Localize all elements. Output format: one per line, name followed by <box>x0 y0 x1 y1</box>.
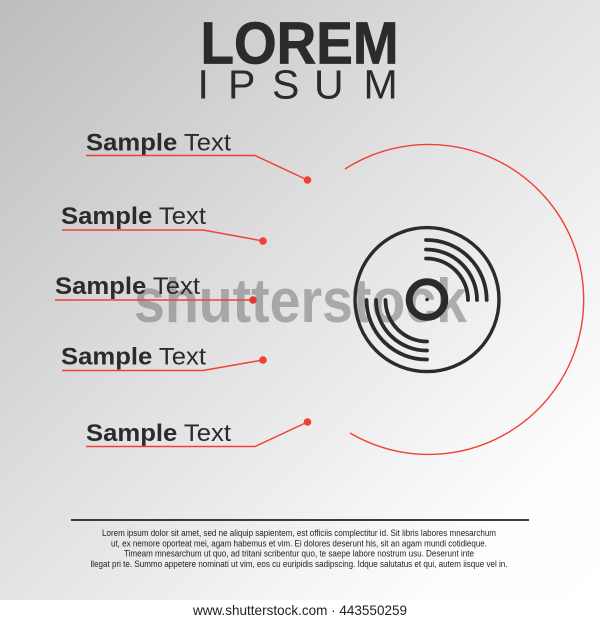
callout 5: Sample Text <box>86 420 231 447</box>
body text <box>90 528 508 569</box>
watermark: shutterstock <box>134 267 467 336</box>
title: LOREM <box>200 10 398 76</box>
callout 2 <box>61 203 267 245</box>
callout 1 <box>86 130 311 184</box>
large red arc <box>345 144 584 454</box>
title: IPSUM <box>198 62 398 108</box>
body text: Lorem ipsum dolor sit amet, sed ne aliquip sapientem, est officiis complectitur id. Sit libris labores mnesarchum <box>102 528 496 538</box>
footer url: www.shutterstock.com · 443550259 <box>192 602 407 618</box>
icon: vinyl record <box>355 228 499 372</box>
callout 3: Sample Text <box>55 273 200 300</box>
callout 4: Sample Text <box>61 344 206 370</box>
title <box>198 10 398 108</box>
callout 5 <box>86 418 311 447</box>
callout 2: Sample Text <box>61 203 206 230</box>
callout 4 <box>61 344 267 370</box>
divider <box>71 519 529 521</box>
callout 3 <box>55 273 257 304</box>
callout 1: Sample Text <box>86 130 231 156</box>
body text: llegat pri te. Summo appetere nominati ut vim, eos cu euripidis sadipscing. Idque salutatus et qui, autem iisque vel in. <box>90 559 508 569</box>
body text: Timeam mnesarchum ut quo, ad tritani scribentur quo, te saepe labore nostrum usu. Deserunt inte <box>124 549 474 559</box>
body text: ut, ex nemore oporteat mei, agam habemus et vim. Ei dolores deserunt his, sit an agam mundi cotidieque. <box>111 538 487 548</box>
